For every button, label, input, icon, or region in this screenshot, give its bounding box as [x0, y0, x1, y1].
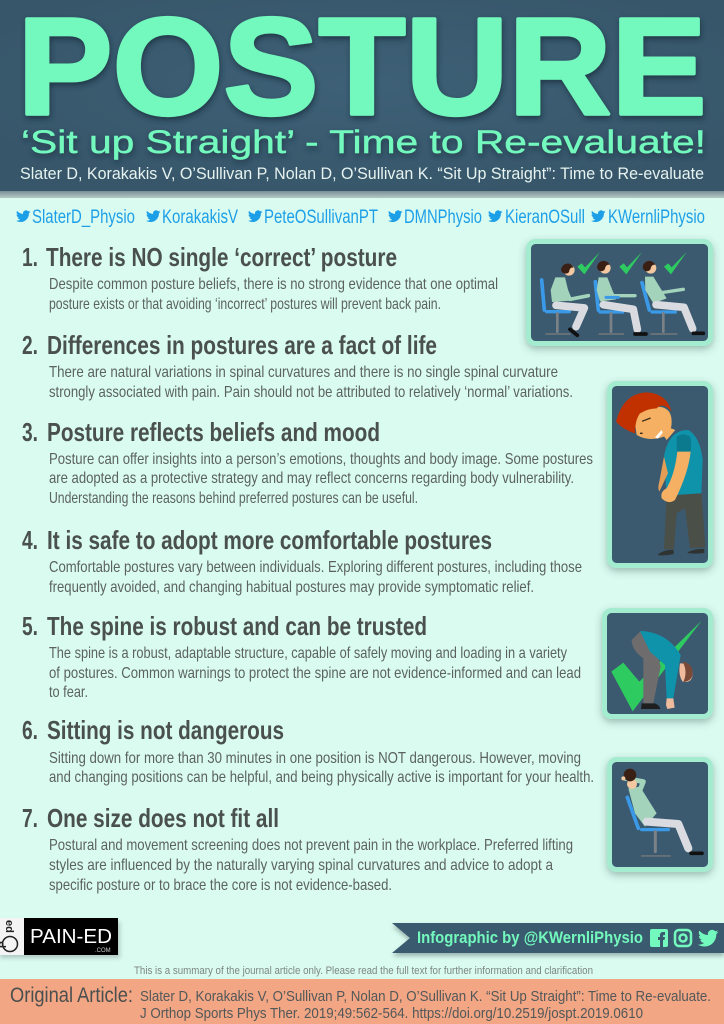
twitter handles row: KieranOSull	[505, 207, 585, 228]
article reference line: Slater D, Korakakis V, O’Sullivan P, Nolan D, O’Sullivan K. “Sit Up Straight”: Time to Re-evaluate	[20, 164, 704, 183]
body 3: Understanding the reasons behind preferred postures can be useful.	[49, 490, 418, 507]
body 4: Comfortable postures vary between individuals. Exploring different postures, including those	[49, 559, 582, 576]
heading 1: 1.	[22, 242, 38, 272]
heading 2: 2.	[22, 330, 38, 360]
heading 4: 4.	[22, 525, 38, 555]
point 4	[22, 525, 582, 596]
body 7: Postural and movement screening does not prevent pain in the workplace. Preferred lifting	[49, 837, 573, 854]
twitter handles row	[16, 207, 705, 228]
body 2: strongly associated with pain. Pain should not be attributed to relatively ‘normal’ variations.	[49, 384, 573, 401]
banner: infographic credit: Infographic by @KWernliPhysio	[417, 928, 643, 947]
twitter handles row: PeteOSullivanPT	[264, 207, 378, 228]
body 6: and changing positions can be helpful, and being physically active is important for your health.	[49, 769, 594, 786]
point 7	[22, 803, 573, 894]
panel: reclined seated figure	[610, 760, 710, 870]
body 2: There are natural variations in spinal curvatures and there is no single spinal curvature	[49, 364, 558, 381]
panel: forward bending figure with large check	[604, 610, 710, 716]
heading 5: 5.	[22, 611, 38, 641]
header band	[0, 0, 724, 198]
citation: J Orthop Sports Phys Ther. 2019;49:562-564. https://doi.org/10.2519/jospt.2019.0610	[140, 1005, 643, 1022]
icon: instagram	[675, 930, 691, 946]
citation	[140, 988, 711, 1022]
body 7	[49, 837, 573, 894]
logo: PAIN-ED: ed	[3, 920, 15, 933]
heading 1: There is NO single ‘correct’ posture	[46, 242, 397, 272]
point 3	[22, 417, 593, 507]
body 5: The spine is a robust, adaptable structure, capable of safely moving and loading in a variety	[49, 645, 567, 662]
panel: three seated figures with check marks	[528, 242, 710, 344]
body 3: are adopted as a protective strategy and may reflect concerns regarding body vulnerability.	[49, 470, 574, 487]
point 5	[22, 611, 581, 701]
point 1	[22, 242, 498, 313]
icon: twitter	[698, 930, 718, 946]
logo: PAIN-ED	[0, 918, 120, 958]
heading 6: 6.	[22, 715, 38, 745]
heading 2: Differences in postures are a fact of life	[47, 330, 437, 360]
seated figure 3	[642, 252, 703, 334]
body 3	[49, 451, 593, 507]
body 1: Despite common posture beliefs, there is no strong evidence that one optimal	[49, 276, 498, 293]
heading 3: Posture reflects beliefs and mood	[47, 417, 380, 447]
footer label: Original Article:	[10, 984, 133, 1007]
logo: PAIN-ED: .COM	[95, 948, 111, 954]
point 2	[22, 330, 573, 401]
body 5: to fear.	[49, 684, 88, 701]
subtitle: ‘Sit up Straight’ - Time to Re-evaluate!	[21, 124, 706, 160]
heading 5: The spine is robust and can be trusted	[47, 611, 427, 641]
body 2	[49, 364, 573, 401]
heading 3: 3.	[22, 417, 38, 447]
body 7: specific posture or to brace the core is not evidence-based.	[49, 877, 392, 894]
heading 7: 7.	[22, 803, 38, 833]
disclaimer: This is a summary of the journal article only. Please read the full text for further information and clarification	[134, 965, 593, 977]
heading 4: It is safe to adopt more comfortable postures	[47, 525, 492, 555]
seated figure 1	[542, 252, 600, 335]
body 4	[49, 559, 582, 596]
panel: slumped figure with red hair	[610, 384, 710, 566]
seated figure 2	[595, 252, 646, 334]
twitter handles row: KorakakisV	[162, 207, 238, 228]
twitter handles row: SlaterD_Physio	[32, 207, 135, 228]
body 1	[49, 276, 498, 313]
body 6: Sitting down for more than 30 minutes in one position is NOT dangerous. However, moving	[49, 750, 581, 767]
body 7: styles are influenced by the naturally varying spinal curvatures and advice to adopt a	[49, 857, 553, 874]
body 5	[49, 645, 581, 701]
banner: infographic credit	[392, 923, 724, 956]
body 1: posture exists or that avoiding ‘incorrect’ postures will prevent back pain.	[49, 296, 441, 313]
body 6	[49, 750, 594, 786]
twitter handles row: DMNPhysio	[404, 207, 482, 228]
heading 6: Sitting is not dangerous	[47, 715, 284, 745]
heading 7: One size does not fit all	[47, 803, 279, 833]
original article footer	[0, 979, 724, 1024]
point 6	[22, 715, 594, 786]
body 3: Posture can offer insights into a person’s emotions, thoughts and body image. Some postures	[49, 451, 593, 468]
logo: PAIN-ED: PAIN-ED	[30, 926, 112, 948]
body 4: frequently avoided, and changing habitual postures may provide symptomatic relief.	[49, 579, 534, 596]
icon: facebook	[650, 929, 668, 947]
body 5: of postures. Common warnings to protect the spine are not evidence-informed and can lead	[49, 665, 581, 682]
